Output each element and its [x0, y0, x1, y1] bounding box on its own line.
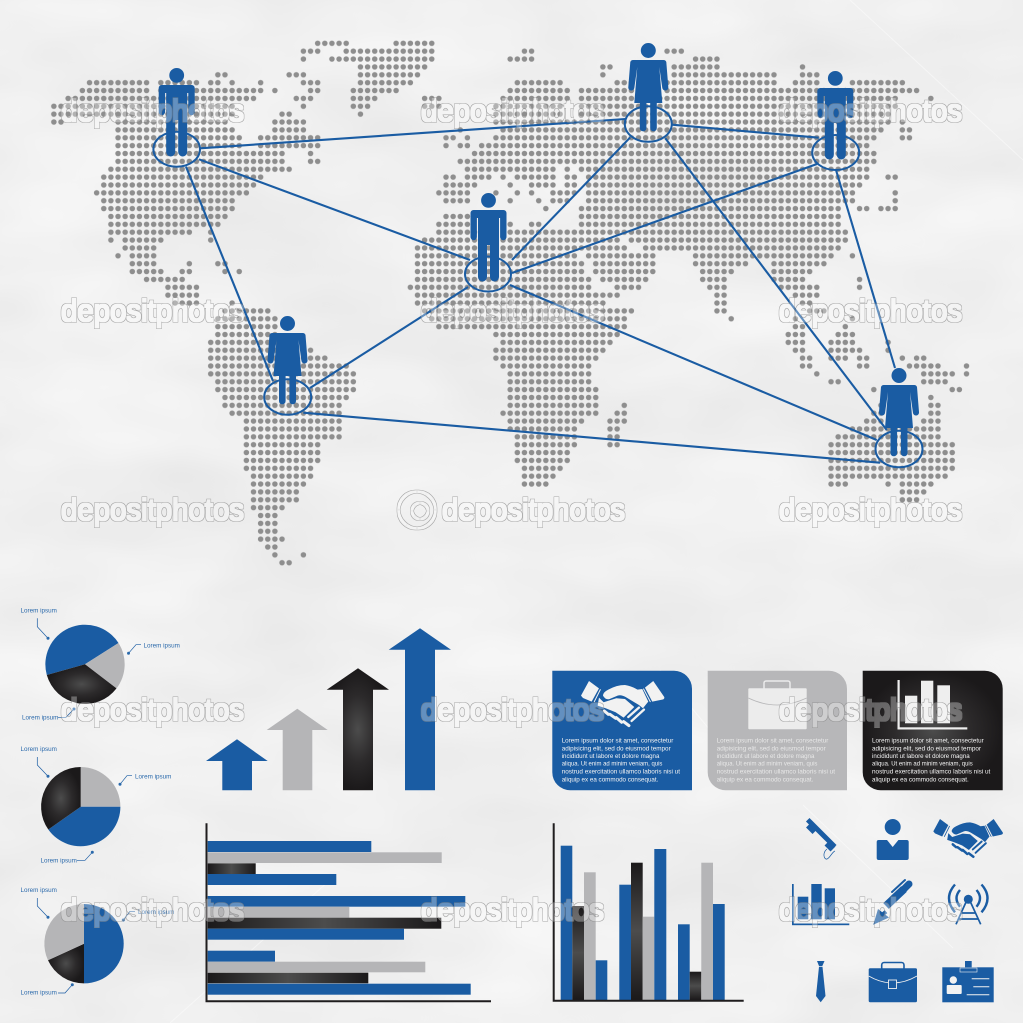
- icon: bar chart: [792, 884, 849, 925]
- person: Australia: [879, 368, 919, 456]
- panel text: aliquip ex ea commodo consequat.: [717, 776, 814, 783]
- panel text: aliqua. Ut enim ad minim veniam, quis: [717, 761, 818, 768]
- icon: pen: [873, 880, 909, 925]
- panel text: nostrud exercitation ullamco laboris nisi ut: [562, 769, 680, 776]
- panel text: [872, 737, 990, 783]
- pie 1 labels: [20, 608, 180, 721]
- icon: briefcase: [869, 962, 917, 1002]
- vertical bar chart: [554, 823, 744, 1001]
- pie 2 labels: [20, 746, 171, 864]
- icon: antenna: [949, 884, 988, 924]
- panel text: [562, 737, 680, 783]
- person: Russia: [628, 43, 668, 131]
- icon: ID badge: [942, 961, 994, 1002]
- panel text: adipisicing elit, sed do eiusmod tempor: [562, 745, 672, 752]
- pie 1 labels: Lorem ipsum: [144, 642, 180, 649]
- growth arrows: [206, 628, 451, 790]
- panel text: aliquip ex ea commodo consequat.: [872, 776, 969, 783]
- person: North America: [159, 68, 195, 156]
- panel text: incididunt ut labore et dolore magna: [562, 753, 660, 760]
- panel text: aliquip ex ea commodo consequat.: [562, 776, 659, 783]
- depositphotos watermarks: depositphotos: [779, 93, 962, 128]
- depositphotos watermarks: depositphotos: [61, 492, 244, 527]
- pie 3 labels: Lorem ipsum: [20, 990, 57, 997]
- panel text: adipisicing elit, sed do eiusmod tempor: [717, 745, 827, 752]
- panel: briefcase: [708, 671, 847, 790]
- depositphotos watermarks: depositphotos: [779, 492, 962, 527]
- icon: handshake: [933, 819, 1003, 857]
- dotted world map: [50, 43, 970, 563]
- panel text: adipisicing elit, sed do eiusmod tempor: [872, 745, 982, 752]
- panel text: nostrud exercitation ullamco laboris nisi ut: [717, 769, 835, 776]
- depositphotos watermarks: depositphotos: [421, 293, 604, 328]
- panel text: incididunt ut labore et dolore magna: [717, 753, 815, 760]
- node rings: [153, 106, 922, 467]
- icon: handshake: [581, 681, 664, 726]
- pie chart 2: [41, 767, 120, 846]
- pie 2 labels: Lorem ipsum: [135, 773, 171, 780]
- person: East Asia: [817, 71, 853, 159]
- pie chart 1: [45, 625, 125, 704]
- panel text: aliqua. Ut enim ad minim veniam, quis: [872, 761, 973, 768]
- icon: person bust: [877, 819, 909, 860]
- depositphotos watermarks: depositphotos: [779, 293, 962, 328]
- horizontal bar chart: [206, 823, 491, 1001]
- pie 1 labels: Lorem ipsum: [22, 714, 58, 721]
- pie chart 3: [44, 904, 124, 983]
- panel: chart: [863, 671, 1003, 790]
- depositphotos watermarks: depositphotos: [421, 892, 604, 927]
- panel text: Lorem ipsum dolor sit amet, consectetur: [872, 737, 985, 744]
- depositphotos watermarks: depositphotos: [61, 93, 244, 128]
- icon: bar chart: [898, 680, 967, 730]
- panel: handshake: [552, 671, 692, 790]
- person: South America: [267, 316, 308, 404]
- pie 3 labels: Lorem ipsum: [138, 909, 174, 916]
- icon: briefcase: [748, 681, 807, 729]
- person: Europe: [470, 193, 506, 281]
- panel text: aliqua. Ut enim ad minim veniam, quis: [562, 761, 663, 768]
- icon: necktie: [816, 961, 826, 1002]
- depositphotos watermarks: depositphotos: [442, 492, 625, 527]
- depositphotos watermarks: depositphotos: [61, 293, 244, 328]
- panel text: nostrud exercitation ullamco laboris nisi ut: [872, 769, 990, 776]
- pie 3 labels: [20, 887, 174, 997]
- depositphotos watermarks: depositphotos: [421, 692, 604, 727]
- depositphotos watermarks: depositphotos: [779, 892, 962, 927]
- icon: telephone: [808, 822, 835, 859]
- panel text: incididunt ut labore et dolore magna: [872, 753, 970, 760]
- panel text: Lorem ipsum dolor sit amet, consectetur: [562, 737, 674, 744]
- depositphotos watermarks: depositphotos: [61, 892, 244, 927]
- pie 3 labels: Lorem ipsum: [20, 887, 57, 894]
- panel text: Lorem ipsum dolor sit amet, consectetur: [717, 737, 829, 744]
- pie 2 labels: Lorem ipsum: [20, 746, 57, 753]
- depositphotos watermarks: depositphotos: [61, 692, 244, 727]
- panel text: [717, 737, 835, 783]
- depositphotos watermarks: depositphotos: [779, 692, 962, 727]
- depositphotos watermarks: [61, 93, 962, 927]
- network connection lines: [186, 119, 895, 463]
- depositphotos watermarks: depositphotos: [421, 93, 604, 128]
- pie 1 labels: Lorem ipsum: [20, 608, 57, 615]
- pie 2 labels: Lorem ipsum: [40, 857, 77, 864]
